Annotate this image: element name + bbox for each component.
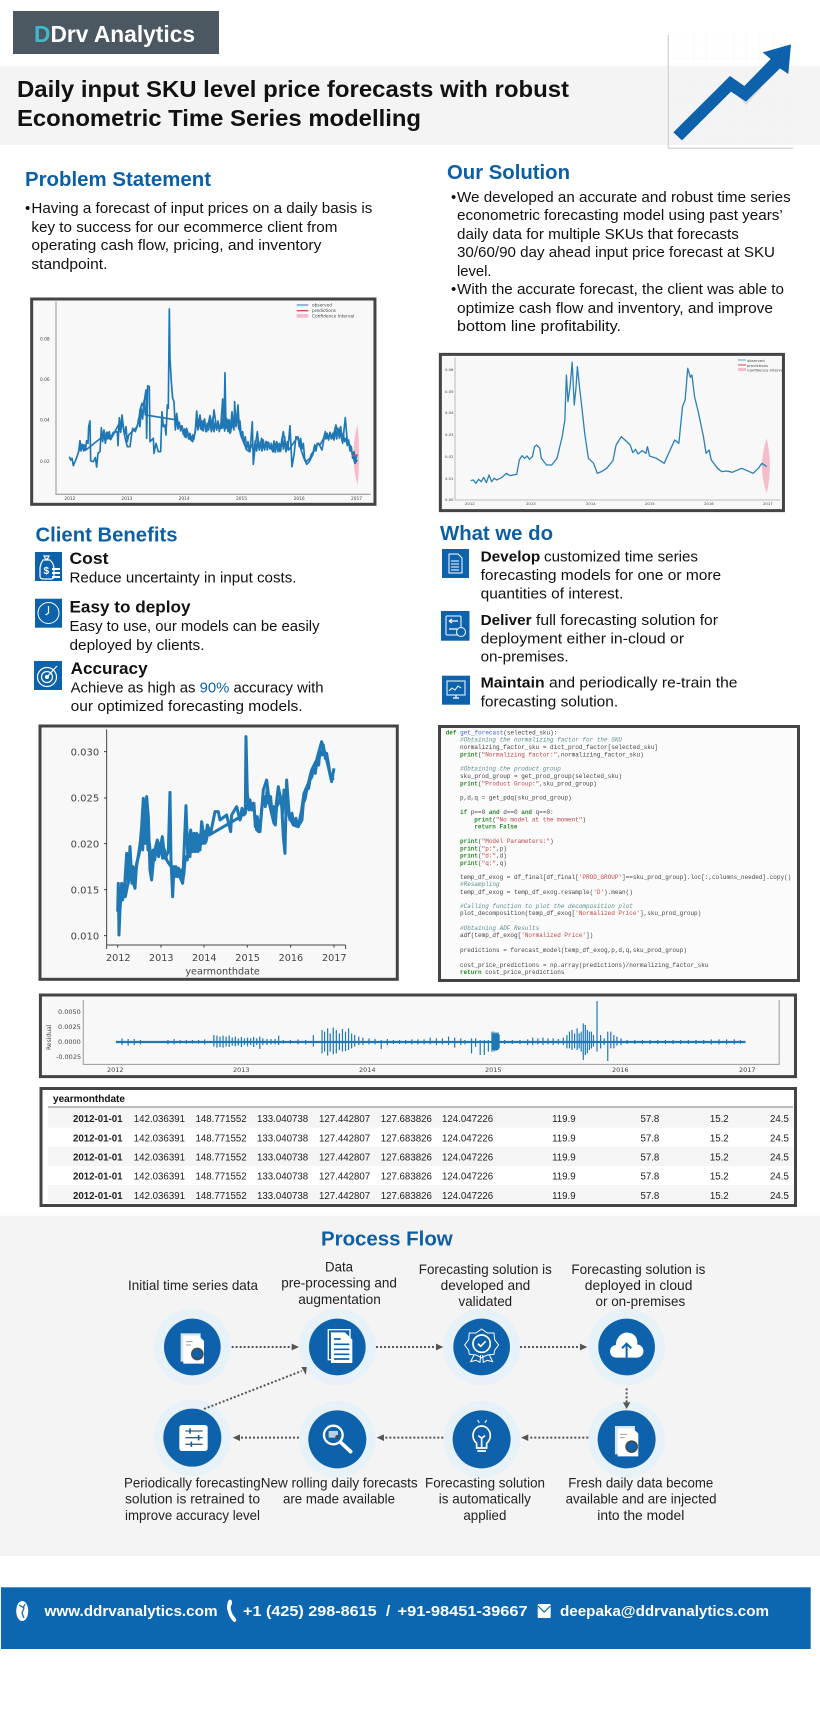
icon: document xyxy=(442,549,469,578)
text: our solution body: bottom line profitability. xyxy=(457,318,621,335)
table row 4: 15.2 xyxy=(710,1172,729,1182)
table row 2: 148.771552 xyxy=(196,1134,247,1144)
step labels bottom row: available and are injected xyxy=(566,1490,717,1506)
step 6 icon: light bulb xyxy=(443,1401,520,1478)
icon: deliver xyxy=(441,611,470,641)
arrow: step 8 back to 2 xyxy=(204,1367,307,1409)
chart: observed vs predictions 2: 0.04 xyxy=(445,410,454,415)
text: our solution body: 30/60/90 day ahead input price forecast at SKU xyxy=(457,244,775,261)
icon: money bag: $ xyxy=(44,566,50,577)
text: maintain: forecasting solution. xyxy=(481,693,618,710)
table row 4: 142.036391 xyxy=(134,1172,185,1182)
text: our solution body: daily data for multiple SKUs that forecasts xyxy=(457,226,739,243)
table row 2: 15.2 xyxy=(710,1134,729,1144)
step labels top row: Initial time series data xyxy=(128,1277,258,1293)
table: data sample: yearmonthdate xyxy=(53,1093,125,1105)
text: cost xyxy=(70,550,296,587)
text: deliver: on-premises. xyxy=(481,649,569,666)
heading: process flow: Process Flow xyxy=(321,1229,453,1251)
arrow: step 3 to 4 xyxy=(520,1344,587,1350)
chart: yearmonthdate price series: 2017 xyxy=(322,953,347,964)
table row 5: 133.040738 xyxy=(257,1191,308,1202)
panel: code snippet xyxy=(440,726,798,980)
panel: problem statement xyxy=(25,168,372,273)
text: problem statement body: key to success for our ecommerce client from xyxy=(31,219,337,236)
panel: code snippet: print("q:",q) xyxy=(460,860,507,867)
text: our solution body: With the accurate forecast, the client was able to xyxy=(457,281,784,298)
chart: residual: 2015 xyxy=(485,1066,502,1074)
text: develop: customized time series xyxy=(544,549,698,566)
text: accuracy: Achieve as high as 90% accuracy with xyxy=(71,680,324,697)
chart: yearmonthdate price series: 0.030 xyxy=(71,747,99,758)
step labels top row: Forecasting solution is xyxy=(419,1261,552,1277)
step 7 icon: magnifier xyxy=(299,1401,376,1478)
chart: residual: 0.0050 xyxy=(58,1008,81,1016)
text: our solution body: • xyxy=(451,189,456,206)
step labels bottom row: improve accuracy level xyxy=(125,1507,260,1523)
text: easy to deploy: Easy to use, our models can be easily xyxy=(70,618,320,635)
chart legend: predictions xyxy=(312,308,337,314)
text: our solution body: optimize cash flow and inventory, and improve xyxy=(457,300,773,317)
chart: observed vs predictions 1: 0.06 xyxy=(40,377,50,383)
icon: globe xyxy=(16,1601,28,1621)
table row 2 xyxy=(73,1134,789,1144)
table row 4: 133.040738 xyxy=(257,1172,308,1182)
text: cost: Reduce uncertainty in input costs. xyxy=(70,570,296,587)
text: problem statement body: • xyxy=(25,200,30,217)
title xyxy=(17,76,569,131)
table row 1: 127.683826 xyxy=(381,1114,432,1125)
text: website: www.ddrvanalytics.com xyxy=(43,1603,217,1620)
table row 4: 119.9 xyxy=(552,1172,576,1182)
table row 1: 133.040738 xyxy=(257,1114,308,1125)
text: email: deepaka@ddrvanalytics.com xyxy=(560,1603,769,1620)
step 2 icon: document xyxy=(299,1309,376,1385)
text: our solution body xyxy=(451,189,791,335)
table row 4: 57.8 xyxy=(640,1172,659,1182)
logo: DDrv Analytics xyxy=(34,21,195,47)
text: phone numbers: +1 (425) 298-8615 xyxy=(243,1603,377,1620)
chart: yearmonthdate price series: 2014 xyxy=(192,953,217,964)
text: our solution body: econometric forecasting model using past years’ xyxy=(457,207,783,224)
chart legend: predictions xyxy=(747,363,768,368)
heading: problem statement: Problem Statement xyxy=(25,168,211,191)
title: Econometric Time Series modelling xyxy=(17,105,421,131)
table row 5: 24.5 xyxy=(770,1191,789,1202)
text: accuracy: our optimized forecasting models. xyxy=(71,698,303,715)
text: deliver: full forecasting solution for xyxy=(536,612,718,629)
chart: observed vs predictions 2: 0.06 xyxy=(445,367,454,372)
icon: target xyxy=(34,661,62,690)
arrow: step 4 down to 5 xyxy=(623,1388,630,1409)
icon: rising arrow chart xyxy=(668,32,793,148)
chart: observed vs predictions 2: 0.01 xyxy=(445,476,454,481)
table row 3: 2012-01-01 xyxy=(73,1152,123,1164)
text: accuracy xyxy=(71,660,324,715)
panel: code snippet: if p==0 and d==0 and q==0: xyxy=(460,809,554,816)
chart: observed vs predictions 1: 2016 xyxy=(294,496,305,502)
panel: code snippet: temp_df_exog = temp_df_exog.resample('D').mean() xyxy=(460,889,633,896)
chart: yearmonthdate price series: 0.020 xyxy=(71,839,99,850)
text: cost: Cost xyxy=(70,550,109,568)
chart: residual: 0.0000 xyxy=(58,1038,81,1046)
chart: yearmonthdate price series: 0.010 xyxy=(71,931,99,942)
icon: mail xyxy=(538,1604,551,1618)
table row 3: 127.683826 xyxy=(381,1152,432,1164)
panel: code snippet: plot_decomposition(temp_df_exog['Normalized Price'],sku_prod_group) xyxy=(460,910,701,917)
chart legend xyxy=(738,358,784,372)
text: maintain: and periodically re-train the xyxy=(549,675,738,692)
table row 1: 57.8 xyxy=(640,1114,659,1125)
step 8 icon: settings sliders xyxy=(154,1399,231,1476)
chart: residual: 2014 xyxy=(359,1066,376,1074)
table row 5 xyxy=(73,1191,789,1202)
title: Daily input SKU level price forecasts with robust xyxy=(17,76,569,102)
step labels bottom row: Periodically forecasting xyxy=(124,1474,261,1490)
text: maintain xyxy=(481,675,738,710)
chart: observed vs predictions 1: 0.02 xyxy=(40,459,50,465)
text: deliver: deployment either in-cloud or xyxy=(481,630,684,647)
chart: observed vs predictions 2: 2012 xyxy=(465,501,475,506)
step labels bottom row: is automatically xyxy=(439,1490,531,1506)
arrow: step 5 to 6 xyxy=(521,1434,588,1441)
chart: observed vs predictions 2: 0.00 xyxy=(445,497,454,502)
text: develop: Develop xyxy=(481,549,540,566)
table row 1: 148.771552 xyxy=(196,1114,247,1125)
chart: observed vs predictions 1: 2017 xyxy=(351,496,362,502)
chart: residual: 2013 xyxy=(233,1066,250,1074)
chart: yearmonthdate price series: 2015 xyxy=(235,953,260,964)
text: deliver: Deliver xyxy=(481,612,532,629)
chart legend xyxy=(297,303,354,319)
table row 1: 127.442807 xyxy=(319,1114,370,1125)
text: develop: quantities of interest. xyxy=(481,586,623,603)
panel: code snippet: print("Normalizing factor:",normalizing_factor_sku) xyxy=(460,751,644,758)
arrow: step 2 to 3 xyxy=(376,1344,443,1350)
step labels bottom row xyxy=(124,1474,717,1523)
text: phone numbers xyxy=(243,1603,528,1620)
panel: code snippet: cost_price_predictions = np.array(predictions)/normalizing_factor_sku xyxy=(460,962,709,969)
footer contact bar xyxy=(1,1587,811,1649)
chart: yearmonthdate price series: 2016 xyxy=(279,953,303,964)
panel: code snippet: #Calling function to plot the decomposition plot xyxy=(460,903,633,910)
panel: process flow xyxy=(0,1216,820,1556)
heading: client benefits: Client Benefits xyxy=(36,524,178,547)
table row 4: 124.047226 xyxy=(442,1172,493,1182)
chart: observed vs predictions 2: 2015 xyxy=(645,501,655,506)
step labels bottom row: into the model xyxy=(597,1507,684,1523)
table row 4: 2012-01-01 xyxy=(73,1172,123,1182)
text: easy to deploy xyxy=(70,599,320,654)
table row 1: 142.036391 xyxy=(134,1114,185,1125)
text: maintain: Maintain xyxy=(481,675,545,692)
step labels bottom row: Fresh daily data become xyxy=(568,1474,713,1490)
panel: what we do xyxy=(440,522,738,710)
icon: phone xyxy=(227,1600,236,1622)
text: phone numbers: / xyxy=(386,1603,391,1620)
step 5 icon: fresh data xyxy=(588,1401,665,1478)
chart: observed vs predictions 1: 2013 xyxy=(121,496,133,502)
chart: residual xyxy=(40,995,796,1077)
heading: what we do: What we do xyxy=(440,522,553,545)
chart: observed vs predictions 2: 0.02 xyxy=(445,454,454,459)
table row 2: 119.9 xyxy=(552,1134,576,1144)
panel: our solution xyxy=(447,161,791,335)
table row 1: 119.9 xyxy=(552,1114,576,1125)
table row 4: 148.771552 xyxy=(196,1172,247,1182)
text: accuracy: Accuracy xyxy=(71,660,148,678)
text: phone numbers: +91-98451-39667 xyxy=(398,1603,528,1620)
step labels bottom row: Forecasting solution xyxy=(425,1474,545,1490)
text: develop: forecasting models for one or more xyxy=(481,567,721,584)
table row 3: 142.036391 xyxy=(134,1152,185,1164)
chart: observed vs predictions 1: 2012 xyxy=(64,496,76,502)
chart: observed vs predictions 1: 0.08 xyxy=(40,336,50,342)
chart legend: observed xyxy=(747,358,765,363)
chart: observed vs predictions 1 xyxy=(32,299,375,504)
panel: code snippet: return False xyxy=(474,824,518,831)
arrow: step 7 to 8 xyxy=(233,1434,299,1441)
step circles and arrows xyxy=(154,1309,665,1478)
step labels bottom row: are made available xyxy=(283,1490,395,1506)
table row 2: 142.036391 xyxy=(134,1134,185,1144)
step labels top row: deployed in cloud xyxy=(585,1277,692,1293)
panel: code snippet: normalizing_factor_sku = dict_prod_factor[selected_sku] xyxy=(460,744,658,751)
title band xyxy=(0,66,820,145)
table row 3: 124.047226 xyxy=(442,1152,493,1164)
table row 3 xyxy=(73,1152,789,1164)
step 4 icon: cloud upload xyxy=(588,1309,665,1385)
step labels top row: validated xyxy=(458,1293,512,1309)
table row 1: 15.2 xyxy=(710,1114,729,1125)
step labels bottom row: New rolling daily forecasts xyxy=(261,1474,418,1490)
step 3 icon: award badge xyxy=(443,1309,520,1385)
text: problem statement body xyxy=(25,200,372,273)
chart: observed vs predictions 2: 2016 xyxy=(704,501,714,506)
chart legend: Confidence Interval xyxy=(312,313,354,319)
panel: code snippet: p,d,q = get_pdq(sku_prod_group) xyxy=(460,795,572,802)
panel: code snippet: #Obtaining the normalizing factor for the SKU xyxy=(460,737,622,744)
chart: observed vs predictions 2: 2017 xyxy=(763,501,773,506)
chart: yearmonthdate price series: 0.025 xyxy=(71,794,99,805)
chart: residual: 2012 xyxy=(107,1066,124,1074)
text: deliver xyxy=(481,612,718,666)
panel: code snippet: def get_forecast(selected_sku): xyxy=(446,729,557,736)
panel: code snippet: print("d:",d) xyxy=(460,853,507,860)
panel: code snippet: print("Product Group:",sku_prod_group) xyxy=(460,780,597,787)
step labels bottom row: applied xyxy=(463,1507,506,1523)
table: data sample xyxy=(41,1088,796,1206)
text: problem statement body: standpoint. xyxy=(31,256,107,273)
panel: client benefits xyxy=(34,524,324,715)
panel: code snippet: temp_df_exog = df_final[df_final['PROD_GROUP']==sku_prod_group].loc[:,columns_needed].copy() xyxy=(460,874,791,881)
table row 4: 127.683826 xyxy=(381,1172,432,1182)
chart: yearmonthdate price series xyxy=(40,726,397,979)
table row 1 xyxy=(73,1114,789,1125)
table row 2: 127.442807 xyxy=(319,1134,370,1144)
icon: clock xyxy=(35,599,62,628)
table row 4: 127.442807 xyxy=(319,1172,370,1182)
text: problem statement body: Having a forecast of input prices on a daily basis is xyxy=(31,200,372,217)
table row 2: 133.040738 xyxy=(257,1134,308,1144)
heading: our solution: Our Solution xyxy=(447,161,570,184)
panel: code snippet: sku_prod_group = get_prod_group(selected_sku) xyxy=(460,773,622,780)
table row 5: 127.442807 xyxy=(319,1191,370,1202)
step labels top row: or on-premises xyxy=(596,1293,685,1309)
table row 2: 2012-01-01 xyxy=(73,1134,123,1144)
text: our solution body: level. xyxy=(457,263,492,280)
icon: monitor xyxy=(442,676,470,705)
step labels top row: pre-processing and xyxy=(281,1274,397,1290)
panel: code snippet: print("p:",p) xyxy=(460,845,507,852)
chart: residual: 2017 xyxy=(739,1066,756,1074)
text: problem statement body: operating cash flow, pricing, and inventory xyxy=(31,237,322,254)
table row 2: 24.5 xyxy=(770,1134,789,1144)
table row 1: 124.047226 xyxy=(442,1114,493,1125)
table row 4: 24.5 xyxy=(770,1172,789,1182)
chart: observed vs predictions 2: 2013 xyxy=(526,501,536,506)
step labels top row: Forecasting solution is xyxy=(571,1261,705,1277)
table row 3: 15.2 xyxy=(710,1152,729,1164)
table row 5: 148.771552 xyxy=(196,1191,247,1202)
table row 3: 24.5 xyxy=(770,1152,789,1164)
icon: money bag xyxy=(35,552,62,581)
step labels bottom row: solution is retrained to xyxy=(125,1490,260,1506)
table row 3: 127.442807 xyxy=(319,1152,370,1164)
table row 5: 124.047226 xyxy=(442,1191,493,1202)
chart: yearmonthdate price series: yearmonthdate xyxy=(185,967,260,978)
table row 3: 133.040738 xyxy=(257,1152,308,1164)
text: develop xyxy=(481,549,721,603)
step labels top row: augmentation xyxy=(298,1291,381,1307)
step labels top row: developed and xyxy=(441,1277,530,1293)
table row 5: 142.036391 xyxy=(134,1191,185,1202)
chart: yearmonthdate price series: 2012 xyxy=(106,953,131,964)
table row 1: 24.5 xyxy=(770,1114,789,1125)
text: easy to deploy: Easy to deploy xyxy=(70,599,191,617)
table row 3: 119.9 xyxy=(552,1152,576,1164)
chart: residual: 0.0025 xyxy=(58,1023,81,1031)
text: our solution body: We developed an accurate and robust time series xyxy=(457,189,791,206)
table row 3: 57.8 xyxy=(640,1152,659,1164)
chart: observed vs predictions 1: 0.04 xyxy=(40,418,50,424)
chart: residual: Residual xyxy=(46,1024,53,1050)
table row 5: 57.8 xyxy=(640,1191,659,1202)
table row 5: 127.683826 xyxy=(381,1191,432,1202)
panel: code snippet: print("No model at the moment") xyxy=(474,816,586,823)
arrow: step 1 to 2 xyxy=(232,1344,299,1350)
table row 3: 148.771552 xyxy=(196,1152,247,1164)
table row 4 xyxy=(73,1172,789,1182)
step labels top row: Data xyxy=(325,1259,353,1275)
chart: observed vs predictions 2: 2014 xyxy=(586,501,596,506)
text: easy to deploy: deployed by clients. xyxy=(70,637,204,654)
chart legend: Confidence Interval xyxy=(747,368,784,372)
chart: yearmonthdate price series: 0.015 xyxy=(71,885,99,896)
chart: observed vs predictions 2 xyxy=(440,354,784,511)
table row 2: 57.8 xyxy=(640,1134,659,1144)
panel: code snippet: #Obtaining the product group xyxy=(460,766,561,773)
chart legend: observed xyxy=(312,303,332,309)
panel: code snippet: adf(temp_df_exog['Normalized Price']) xyxy=(460,932,593,939)
table row 2: 127.683826 xyxy=(381,1134,432,1144)
table row 5: 15.2 xyxy=(710,1191,729,1202)
chart: residual: -0.0025 xyxy=(56,1053,81,1061)
panel: code snippet: return cost_price_predictions xyxy=(460,969,565,976)
chart: observed vs predictions 1: 2014 xyxy=(179,496,190,502)
panel: code snippet: #Obtaining ADF Results xyxy=(460,925,540,932)
chart: yearmonthdate price series: 2013 xyxy=(149,953,174,964)
panel: code snippet: predictions = forecast_model(temp_df_exog,p,d,q,sku_prod_group) xyxy=(460,947,687,954)
step labels top row xyxy=(128,1259,705,1309)
chart: observed vs predictions 1: 2015 xyxy=(236,496,247,502)
arrow: step 6 to 7 xyxy=(377,1434,443,1441)
chart: residual: 2016 xyxy=(612,1066,629,1074)
chart: observed vs predictions 2: 0.05 xyxy=(445,389,454,394)
step 1 icon: initial data xyxy=(154,1309,231,1385)
table row 5: 2012-01-01 xyxy=(73,1191,123,1202)
logo xyxy=(13,11,219,54)
table row 5: 119.9 xyxy=(552,1191,576,1202)
table row 2: 124.047226 xyxy=(442,1134,493,1144)
text: our solution body: • xyxy=(451,281,456,298)
panel: code snippet: #Resampling xyxy=(460,881,500,888)
table row 1: 2012-01-01 xyxy=(73,1114,123,1125)
chart: observed vs predictions 2: 0.03 xyxy=(445,432,454,437)
panel: code snippet: print("Model Parameters:") xyxy=(460,838,554,845)
